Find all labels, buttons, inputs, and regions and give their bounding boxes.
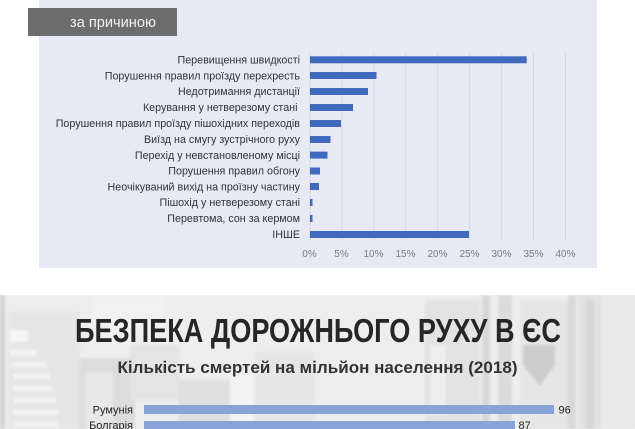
category labels: Пішохід у нетверезому стані bbox=[160, 197, 300, 209]
axis labels: 15% bbox=[395, 249, 416, 260]
axis labels: 30% bbox=[491, 249, 512, 260]
category labels: Порушення правил обгону bbox=[168, 166, 301, 178]
heading tag: за причиною: за причиною bbox=[70, 15, 156, 31]
axis labels: 5% bbox=[334, 249, 349, 260]
category labels: Порушення правил проїзду пішохідних переходів bbox=[56, 118, 300, 130]
subtitle: Кількість смертей на мільйон населення (2018) bbox=[118, 358, 518, 377]
bar chart: deaths per million bbox=[89, 404, 571, 429]
category labels: Неочікуваний вихід на проїзну частину bbox=[108, 182, 301, 194]
bar: Румунія bbox=[93, 404, 571, 416]
axis labels bbox=[302, 249, 576, 260]
bar: Румунія: Румунія bbox=[93, 404, 133, 416]
category labels: Перехід у невстановленому місці bbox=[135, 150, 300, 162]
category labels: Порушення правил проїзду перехресть bbox=[105, 70, 300, 82]
bar chart: causes bbox=[56, 52, 576, 260]
bars bbox=[310, 56, 527, 238]
category labels: Виїзд на смугу зустрічного руху bbox=[144, 134, 301, 146]
axis labels: 0% bbox=[302, 249, 317, 260]
category labels bbox=[56, 55, 301, 241]
axis labels: 40% bbox=[555, 249, 576, 260]
category labels: Перевищення швидкості bbox=[177, 55, 300, 67]
heading tag: за причиною bbox=[28, 8, 177, 36]
axis labels: 10% bbox=[363, 249, 384, 260]
axis labels: 25% bbox=[459, 249, 480, 260]
bar: Румунія: 96 bbox=[558, 404, 571, 416]
bar: Болгарія bbox=[89, 420, 531, 429]
panel: causes chart background bbox=[39, 0, 597, 268]
category labels: Керування у нетверезому стані bbox=[143, 102, 298, 114]
category labels: Недотримання дистанції bbox=[178, 86, 300, 98]
axis labels: 20% bbox=[427, 249, 448, 260]
panel: EU road safety background with city photo bbox=[0, 295, 635, 429]
category labels: Перевтома, сон за кермом bbox=[167, 213, 300, 225]
axis labels: 35% bbox=[523, 249, 544, 260]
category labels: ІНШЕ bbox=[272, 229, 300, 241]
